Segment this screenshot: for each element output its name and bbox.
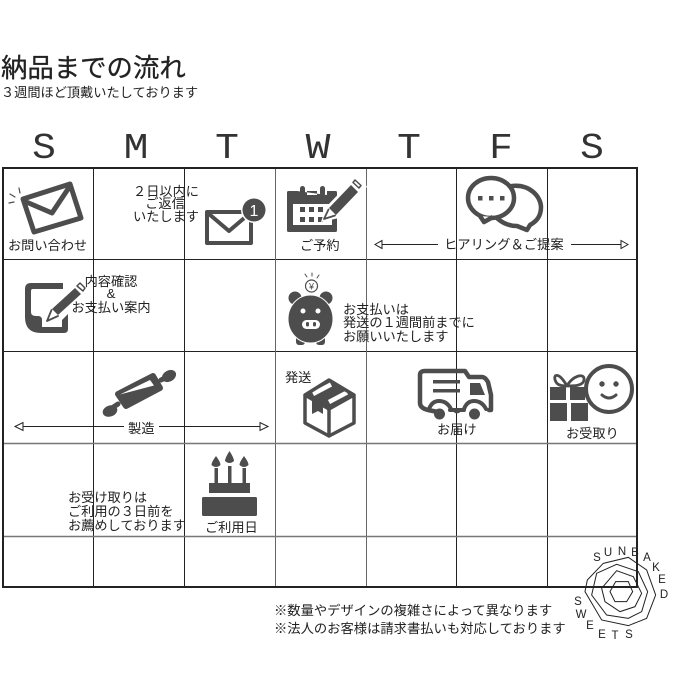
icon: box <box>305 380 354 436</box>
icon: smiley <box>586 366 632 412</box>
logo: Sunbaked Sweets: W <box>576 609 587 621</box>
logo: Sunbaked Sweets: S <box>593 552 601 564</box>
logo: Sunbaked Sweets: T <box>611 630 619 642</box>
icon: mail with badge <box>207 197 267 243</box>
icon: gift box <box>550 375 588 421</box>
text: receive three days before: ご利用の３日前を <box>68 503 174 519</box>
text: confirmation and payment guide: & <box>107 286 116 301</box>
arrow: hearing and proposal <box>375 237 628 252</box>
text: payment note: お支払いは <box>343 302 409 317</box>
text: reply within two days: ２日以内に <box>133 184 199 199</box>
subtitle: ３週間ほど頂戴いたしております <box>1 85 198 100</box>
text: payment note: お願いいたします <box>343 329 448 344</box>
logo: Sunbaked Sweets: B <box>631 547 639 559</box>
logo: Sunbaked Sweets: A <box>643 552 651 564</box>
logo: Sunbaked Sweets: S <box>625 629 633 641</box>
weekday headers <box>32 128 604 169</box>
text: reply within two days: いたします <box>133 209 199 224</box>
weekday headers: M <box>124 128 148 169</box>
logo: Sunbaked Sweets: E <box>586 620 594 632</box>
logo: Sunbaked Sweets: U <box>604 547 612 559</box>
weekday headers: F <box>489 129 513 169</box>
logo: Sunbaked Sweets <box>574 546 668 642</box>
icon: mail with badge: 1 <box>250 203 259 220</box>
logo: Sunbaked Sweets: K <box>652 562 660 574</box>
text: payment note <box>343 302 475 344</box>
label: delivery: お届け <box>437 422 477 437</box>
label: shipping: 発送 <box>285 370 311 385</box>
weekday headers: S <box>32 129 56 169</box>
icon: birthday cake <box>202 451 257 516</box>
icon: piggy bank with coin: ¥ <box>308 282 315 292</box>
arrow: manufacturing <box>15 421 268 436</box>
logo: Sunbaked Sweets: E <box>658 574 666 586</box>
arrow: manufacturing: 製造 <box>128 421 155 436</box>
weekday headers: T <box>215 129 239 169</box>
text: payment note: 発送の１週間前までに <box>343 314 475 330</box>
calendar grid <box>3 168 637 587</box>
label: receipt: お受取り <box>566 426 619 441</box>
weekday headers: S <box>580 129 604 169</box>
text: confirmation and payment guide: お支払い案内 <box>71 300 151 315</box>
icon: piggy bank with coin <box>288 273 333 345</box>
text: receive three days before: お薦めしております <box>68 518 186 533</box>
icon: rolling pin <box>101 367 178 419</box>
logo: Sunbaked Sweets: N <box>618 546 626 558</box>
arrow: hearing and proposal: ヒアリング＆ご提案 <box>444 237 564 252</box>
weekday headers: T <box>397 129 421 169</box>
text: reply within two days: ご返信 <box>145 196 185 211</box>
text: confirmation and payment guide: 内容確認 <box>85 273 137 289</box>
text: receive three days before <box>68 490 186 533</box>
icon: speech bubbles <box>468 178 541 230</box>
label: inquiry: お問い合わせ <box>8 238 87 253</box>
logo: Sunbaked Sweets: S <box>574 596 582 608</box>
text: confirmation and payment guide <box>71 273 151 315</box>
footnotes: ※数量やデザインの複雑さによって異なります <box>274 602 552 618</box>
text: reply within two days <box>133 184 199 224</box>
logo: Sunbaked Sweets: D <box>660 589 668 601</box>
title: 納品までの流れ <box>1 53 186 83</box>
icon: envelope with rays <box>9 184 81 232</box>
weekday headers: W <box>306 128 331 169</box>
logo: Sunbaked Sweets: E <box>598 629 606 641</box>
icon: note and pencil <box>25 279 90 333</box>
icon: calendar and pencil <box>287 176 367 232</box>
footnotes <box>274 602 566 636</box>
label: day of use: ご利用日 <box>205 520 258 535</box>
text: receive three days before: お受け取りは <box>68 490 147 505</box>
icon: delivery truck <box>420 371 491 420</box>
footnotes: ※法人のお客様は請求書払いも対応しております <box>274 621 566 636</box>
label: reservation: ご予約 <box>300 238 340 253</box>
